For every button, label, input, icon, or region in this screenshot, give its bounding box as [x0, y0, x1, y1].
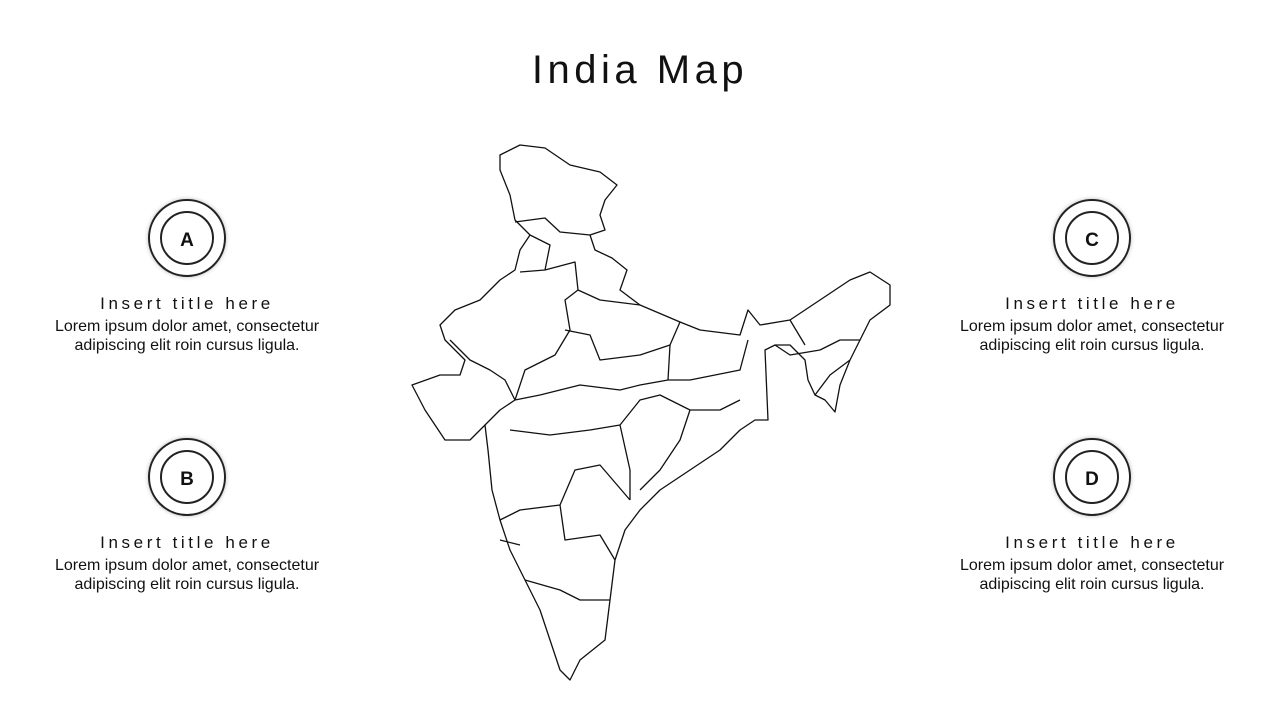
badge D: D: [1085, 469, 1099, 490]
badge C: [1053, 199, 1131, 277]
text A: Lorem ipsum dolor amet, consectetur: [55, 318, 319, 335]
badge B: B: [180, 469, 194, 490]
map outline: [412, 145, 890, 680]
text B: adipiscing elit roin cursus ligula.: [74, 576, 300, 593]
item C: [960, 196, 1224, 354]
title A: Insert title here: [100, 294, 274, 313]
text A: adipiscing elit roin cursus ligula.: [74, 337, 300, 354]
text B: Lorem ipsum dolor amet, consectetur: [55, 557, 319, 574]
item D: [960, 436, 1224, 593]
badge A: A: [180, 230, 194, 251]
text B: [55, 557, 319, 593]
title D: Insert title here: [1005, 533, 1179, 552]
text D: [960, 557, 1224, 593]
title: India Map: [532, 48, 748, 92]
badge A: [148, 199, 226, 277]
title C: Insert title here: [1005, 294, 1179, 313]
text D: adipiscing elit roin cursus ligula.: [980, 576, 1204, 593]
badge C: C: [1085, 230, 1099, 251]
badge B: [148, 438, 226, 516]
title B: Insert title here: [100, 533, 274, 552]
item B: [55, 436, 319, 593]
badge D: [1053, 438, 1131, 516]
text C: adipiscing elit roin cursus ligula.: [980, 337, 1204, 354]
state borders: [450, 218, 860, 600]
text C: Lorem ipsum dolor amet, consectetur: [960, 318, 1224, 335]
text D: Lorem ipsum dolor amet, consectetur: [960, 557, 1224, 574]
text C: [960, 318, 1224, 354]
text A: [55, 318, 319, 354]
item A: [55, 196, 319, 354]
